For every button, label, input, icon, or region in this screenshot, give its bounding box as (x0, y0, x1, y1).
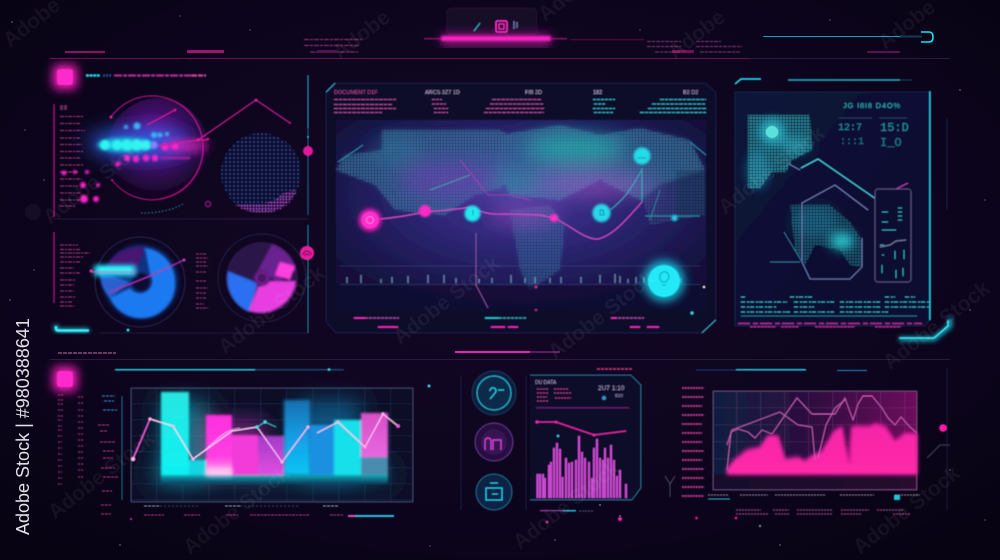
pink badge (300, 246, 314, 260)
bottom tag (540, 510, 593, 512)
left micro list (60, 245, 90, 306)
pink route line (370, 160, 700, 308)
dotted globe (221, 133, 301, 213)
digital readouts: :::1 (840, 137, 864, 148)
bars glow (150, 400, 390, 485)
mini bars (538, 436, 626, 498)
header micro text (334, 90, 706, 112)
header micro text: ARCS 3Z7 1D (425, 90, 460, 96)
header micro text: 182 (593, 90, 602, 96)
icon: glyph dial (475, 423, 513, 461)
vertical stock id: Adobe Stock | #980388641 (13, 318, 33, 535)
side widget (875, 189, 911, 282)
panel: pink area chart (665, 368, 950, 527)
stock watermarks: Adobe Stock (544, 267, 659, 364)
panel: bar chart (53, 367, 430, 520)
digital readouts (838, 121, 909, 150)
marker: cyan top (634, 148, 650, 164)
marker: cyan small (672, 215, 678, 221)
icon: header chip (496, 21, 507, 32)
chart line (131, 412, 400, 464)
marker: pink large (359, 209, 381, 231)
panel: orb and globe (53, 65, 313, 219)
footer bars (354, 318, 659, 327)
map background (336, 120, 706, 310)
left micro list (60, 108, 85, 206)
pink polyline (110, 98, 291, 181)
top lines (727, 396, 917, 470)
panel: world map (326, 83, 716, 333)
left micro columns (58, 395, 122, 514)
top pink rule (50, 50, 950, 59)
stock watermarks: Adobe Stock (389, 252, 504, 349)
header micro text: FIB 2D (525, 90, 542, 96)
icon: glowing pink square (53, 65, 77, 89)
chart background (713, 391, 917, 490)
sun marker (766, 126, 778, 138)
title: JG I8I8 D4O% (843, 101, 901, 110)
cyan rails (696, 369, 867, 371)
stock watermarks: Adobe Stock (509, 457, 624, 554)
status ticks (141, 204, 183, 213)
icon: search dial (472, 371, 516, 415)
continents (336, 125, 705, 290)
map bars (347, 273, 681, 283)
map colour glows (369, 134, 655, 224)
stock watermarks: Adobe Stock (849, 462, 964, 559)
bars (161, 392, 388, 484)
panel: round icons (461, 369, 641, 523)
cyan corner (56, 325, 130, 332)
teal continent (748, 115, 812, 188)
map soft land tone (336, 125, 705, 290)
digital readouts: 15:D (880, 121, 909, 135)
digital readouts: 12:7 (838, 123, 862, 134)
top decoration: header bar (424, 8, 644, 46)
digital readouts: I_O (880, 136, 902, 150)
panel frame lines (54, 75, 308, 219)
stock watermarks: Adobe Stock (179, 462, 294, 559)
footer micro text (708, 495, 920, 514)
panel: donuts (54, 225, 314, 333)
stock watermarks: Adobe Stock (879, 277, 994, 374)
corner ticks (338, 142, 706, 162)
panel: region map (735, 79, 950, 339)
icon: chip dial (476, 474, 512, 510)
cyan progress rail (115, 368, 344, 371)
stock watermarks: Adobe (329, 6, 395, 64)
mini chart heading: DU DATA (535, 380, 557, 386)
teal glow (746, 119, 854, 250)
lower panel frame (54, 225, 308, 333)
chart grid (131, 388, 413, 502)
y labels (682, 388, 704, 496)
connector lines (770, 159, 908, 279)
mini chart heading: B20 (615, 393, 624, 398)
header micro text: B2 D2 (683, 90, 698, 96)
cyan corner brackets (735, 79, 950, 339)
stock watermarks: Adobe Stock (714, 122, 829, 219)
pink ring marker (205, 201, 211, 207)
top decoration: cyan rail with hook (763, 32, 933, 42)
side dots (695, 424, 947, 527)
icon: glowing pink square (53, 367, 77, 391)
donut: blue (90, 237, 186, 327)
donut: pink and blue (218, 234, 306, 322)
glow dots (62, 122, 209, 203)
map bottom tone (336, 285, 706, 310)
header micro text: DOCUMENT D1F (334, 90, 378, 96)
orb circle (108, 98, 208, 198)
divider rail (50, 351, 950, 360)
marker: cyan (464, 206, 480, 222)
mini line (536, 420, 626, 436)
stock watermarks: Adobe Stock (39, 132, 154, 229)
chart footer text (144, 506, 394, 516)
mini chart heading: 2U7 1:10 (598, 385, 625, 392)
area glow (727, 422, 917, 475)
area (727, 424, 917, 474)
panel: mini chart frame (530, 375, 641, 500)
chart frame (131, 388, 413, 502)
stock watermarks: Adobe Stock (214, 262, 329, 359)
marker: large cyan bulb (644, 261, 684, 301)
marker: cyan mid (592, 204, 610, 222)
top decoration: small text groups (304, 40, 742, 52)
marker: pink small (419, 205, 431, 217)
footer micro text (738, 297, 930, 327)
stock watermarks: Adobe Stock (44, 427, 159, 524)
marker: pink dot (550, 214, 558, 222)
pink slider knob (303, 136, 313, 156)
panel heading strip (86, 74, 206, 77)
mini chart heading (535, 380, 629, 408)
lower dark band (714, 474, 916, 489)
grid (713, 391, 917, 490)
micro list between donuts (196, 254, 208, 308)
stock watermarks: Adobe (664, 6, 730, 64)
